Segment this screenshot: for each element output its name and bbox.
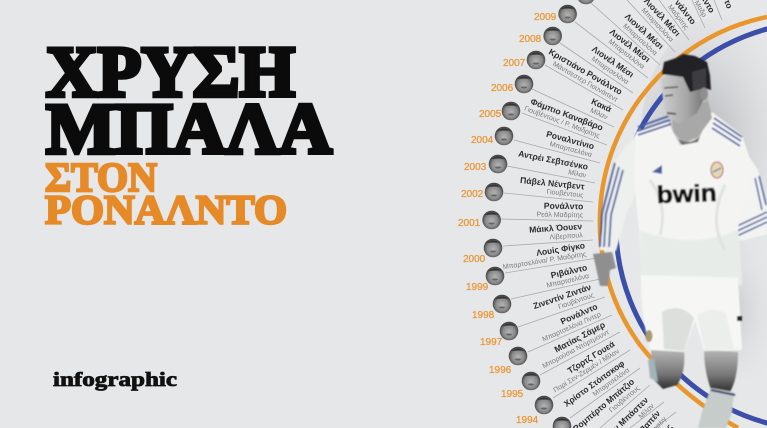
row 2001 [458,201,593,229]
row 1998 [472,262,600,321]
adidas mark [652,165,662,174]
row 2000: Λίβερπουλ [549,231,583,241]
row 2004: 2004 [471,135,494,146]
row 1996: 1996 [489,365,512,376]
row 2006 [491,75,614,127]
row 1993: Χρίστο Στόιτσκοφ [562,358,626,409]
row 1993: Μπαρτσελόνα [591,366,631,398]
row 2009: 2009 [534,12,557,23]
left boot [648,358,658,382]
row 2012 [659,0,699,40]
shadow behind player [640,15,767,265]
right hand [706,228,730,255]
shirt [634,112,752,285]
row 1999: Λουίς Φίγκο [535,240,586,258]
left hand [593,252,616,286]
row 2008: Λιονέλ Μέσι [590,44,636,80]
row 2002 [461,175,593,202]
player figure: com [703,187,714,193]
sponsor text: bwin [656,180,717,209]
shorts [641,275,742,352]
face [660,74,706,123]
row 2007: Μάντσεστερ Γιουνάιτεντ [551,60,619,104]
row 2000 [463,221,593,265]
row 1995 [501,319,620,400]
row 2002: Γιουβέντους [546,188,585,200]
row 2001: 2001 [458,218,481,229]
crest [711,162,723,178]
row 2001: Ρονάλντο [544,201,583,211]
sleeve stripes left [600,163,623,247]
lower shadow behind player [705,240,767,380]
row 2006: Κακά [590,96,614,114]
left leg [651,350,684,389]
row 2003: Μίλαν [567,168,587,180]
neck [672,100,712,143]
row 2003 [464,148,595,183]
row 2010 [577,0,666,65]
row 2007 [503,47,624,110]
title: Χρυση Μπαλα: ΜΠΑΛΑ [46,89,332,169]
row 2007: 2007 [503,58,526,69]
row 2006: Μίλαν [589,106,609,122]
row 2002: 2002 [461,189,484,200]
row 2000: 2000 [463,254,486,265]
row 2009: Λιονέλ Μέσι [608,27,653,65]
row 2004: Ροναλντίνιο [545,129,595,151]
row 2014 [714,0,735,20]
row 1997: Γιουβέντους [557,291,596,311]
right leg [704,350,738,392]
subtitle: Στον Ροναλντο: ΡΟΝΑΛΝΤΟ [45,186,287,232]
row 2005: Γιουβέντους / Ρ. Μαδρίτης [523,104,602,140]
row 2005: Φάμπιο Καναβάρο [529,96,605,133]
timeline rows [458,0,735,428]
row 2011: Μπαρτσελόνα [640,6,675,44]
shorts badge [646,330,652,342]
row 2000: Μάικλ Όουεν [529,221,583,235]
row 2008: Μπαρτσελόνα [590,55,630,86]
row 1995: Μπορούσια Ντόρτμουντ [541,328,611,370]
right arm [722,135,767,240]
row 1994: 1994 [516,415,539,426]
row 1997: 1997 [480,337,503,348]
row 2003: Αντρέι Σεβτσένκο [517,148,589,172]
logo: infographic: infographic [53,369,177,391]
row 1996: Μπαρτσελόνα /Ίντερ [541,310,602,343]
row 1993 [553,358,640,428]
arc: blue [616,22,767,428]
row 1991: Μίλαν [637,402,656,421]
row 2010: Μπαρτσελόνα [621,22,659,57]
row 1999: Μπαρτσελόνα/ Ρ. Μαδρίτης [502,250,588,271]
row 1999: 1999 [466,282,489,293]
row 1996: Ρονάλντο [559,301,599,326]
shirt shadow folds [650,180,725,250]
row 1999 [466,240,597,293]
row 2004 [471,127,600,163]
row 2010: Λιονέλ Μέσι [623,11,666,52]
left arm [599,128,645,251]
row 2009: Μπαρτσελόνα [607,38,646,71]
player figure [593,54,767,428]
row 1990 [637,408,676,428]
shoulder stripes [638,116,742,146]
ear [700,88,708,100]
row 2004: Μπαρτσελόνα [549,140,593,159]
row 1998: Μπαρτσελόνα [546,272,590,290]
subtitle: Στον Ροναλντο: ΣΤΟΝ [45,154,157,200]
row 1992: Γιουβέντους [608,384,642,414]
row 2009 [534,5,653,78]
row 2011 [627,0,683,52]
row 2003: 2003 [464,162,487,173]
row 1997: Ζινεντίν Ζιντάν [532,282,593,311]
row 1997 [480,282,605,348]
row 1998: 1998 [472,310,495,321]
sock [698,388,734,428]
row 2012: Μαδρίτης [666,3,691,32]
row 1995: 1995 [501,389,524,400]
row 2008: 2008 [519,34,542,45]
row 1994: Τζορτζ Γουεά [566,338,617,376]
subtitle: Στον Ροναλντο [45,154,287,232]
row 1998: Ριβάλντο [550,262,588,280]
row 2005 [479,95,607,145]
row 1994: Παρί Σεν-Ζερμέν / Μίλαν [552,347,621,394]
row 1995: Ματίας Σάμερ [553,319,607,355]
row 1996 [489,301,612,376]
title: Χρυση Μπαλα: ΧΡΥΣΗ [46,32,295,112]
row 2007: Κριστιάνο Ρονάλντο [547,47,624,97]
row 2001: Ρεάλ Μαδρίτης [536,211,584,219]
hair [662,54,711,92]
row 2002: Πάβελ Νέντβεντ [520,175,585,192]
row 1994 [516,338,630,426]
title: Χρυση Μπαλα [46,32,332,169]
row 2006: 2006 [491,83,514,94]
row 2013: Μαδρ [692,0,707,19]
arc: orange [600,17,767,428]
row 2008 [519,27,636,93]
row 2005: 2005 [479,109,502,120]
row 2013 [692,0,717,28]
